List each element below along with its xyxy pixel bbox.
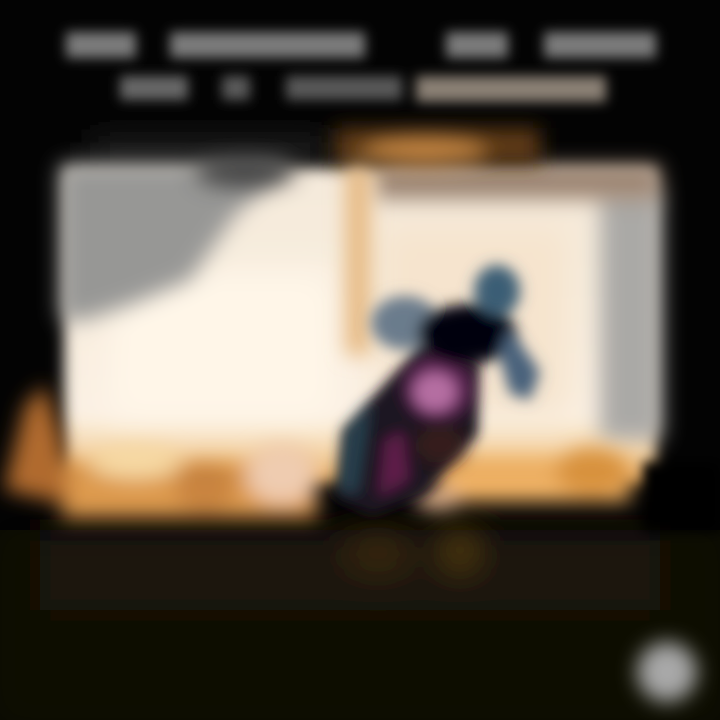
bike left edge blue [337, 400, 372, 495]
brown-grey band top right [375, 165, 660, 199]
helmet [474, 265, 520, 317]
title: illegible blurred lettering, line two [120, 76, 606, 102]
rider torso [420, 304, 516, 364]
grey haze upper left [60, 164, 290, 320]
vertical orange post [346, 165, 370, 355]
dark notch top of the grey haze [195, 156, 295, 188]
badge: round logo [637, 642, 697, 702]
rider back [371, 296, 439, 350]
haze above the panel [90, 140, 330, 166]
motorcycle rider [335, 265, 540, 515]
pink fairing [413, 372, 457, 412]
title: illegible blurred lettering, line one [66, 32, 656, 58]
magenta lower fairing [378, 430, 410, 498]
dark red lower body [414, 425, 466, 465]
orange glow above panel [335, 128, 540, 166]
motorcycle body [335, 345, 480, 515]
grey strip right [600, 190, 662, 440]
rider arm [498, 325, 540, 400]
warm centre of backdrop [110, 225, 570, 420]
ground: dark lower area [0, 524, 720, 720]
orange flame band along bottom [4, 385, 630, 518]
ground: olive glints [344, 526, 412, 574]
purple surround of fairing [404, 356, 472, 420]
panel: bright backdrop [60, 156, 662, 483]
shadow trimming the panel's lower right corner [642, 462, 720, 532]
